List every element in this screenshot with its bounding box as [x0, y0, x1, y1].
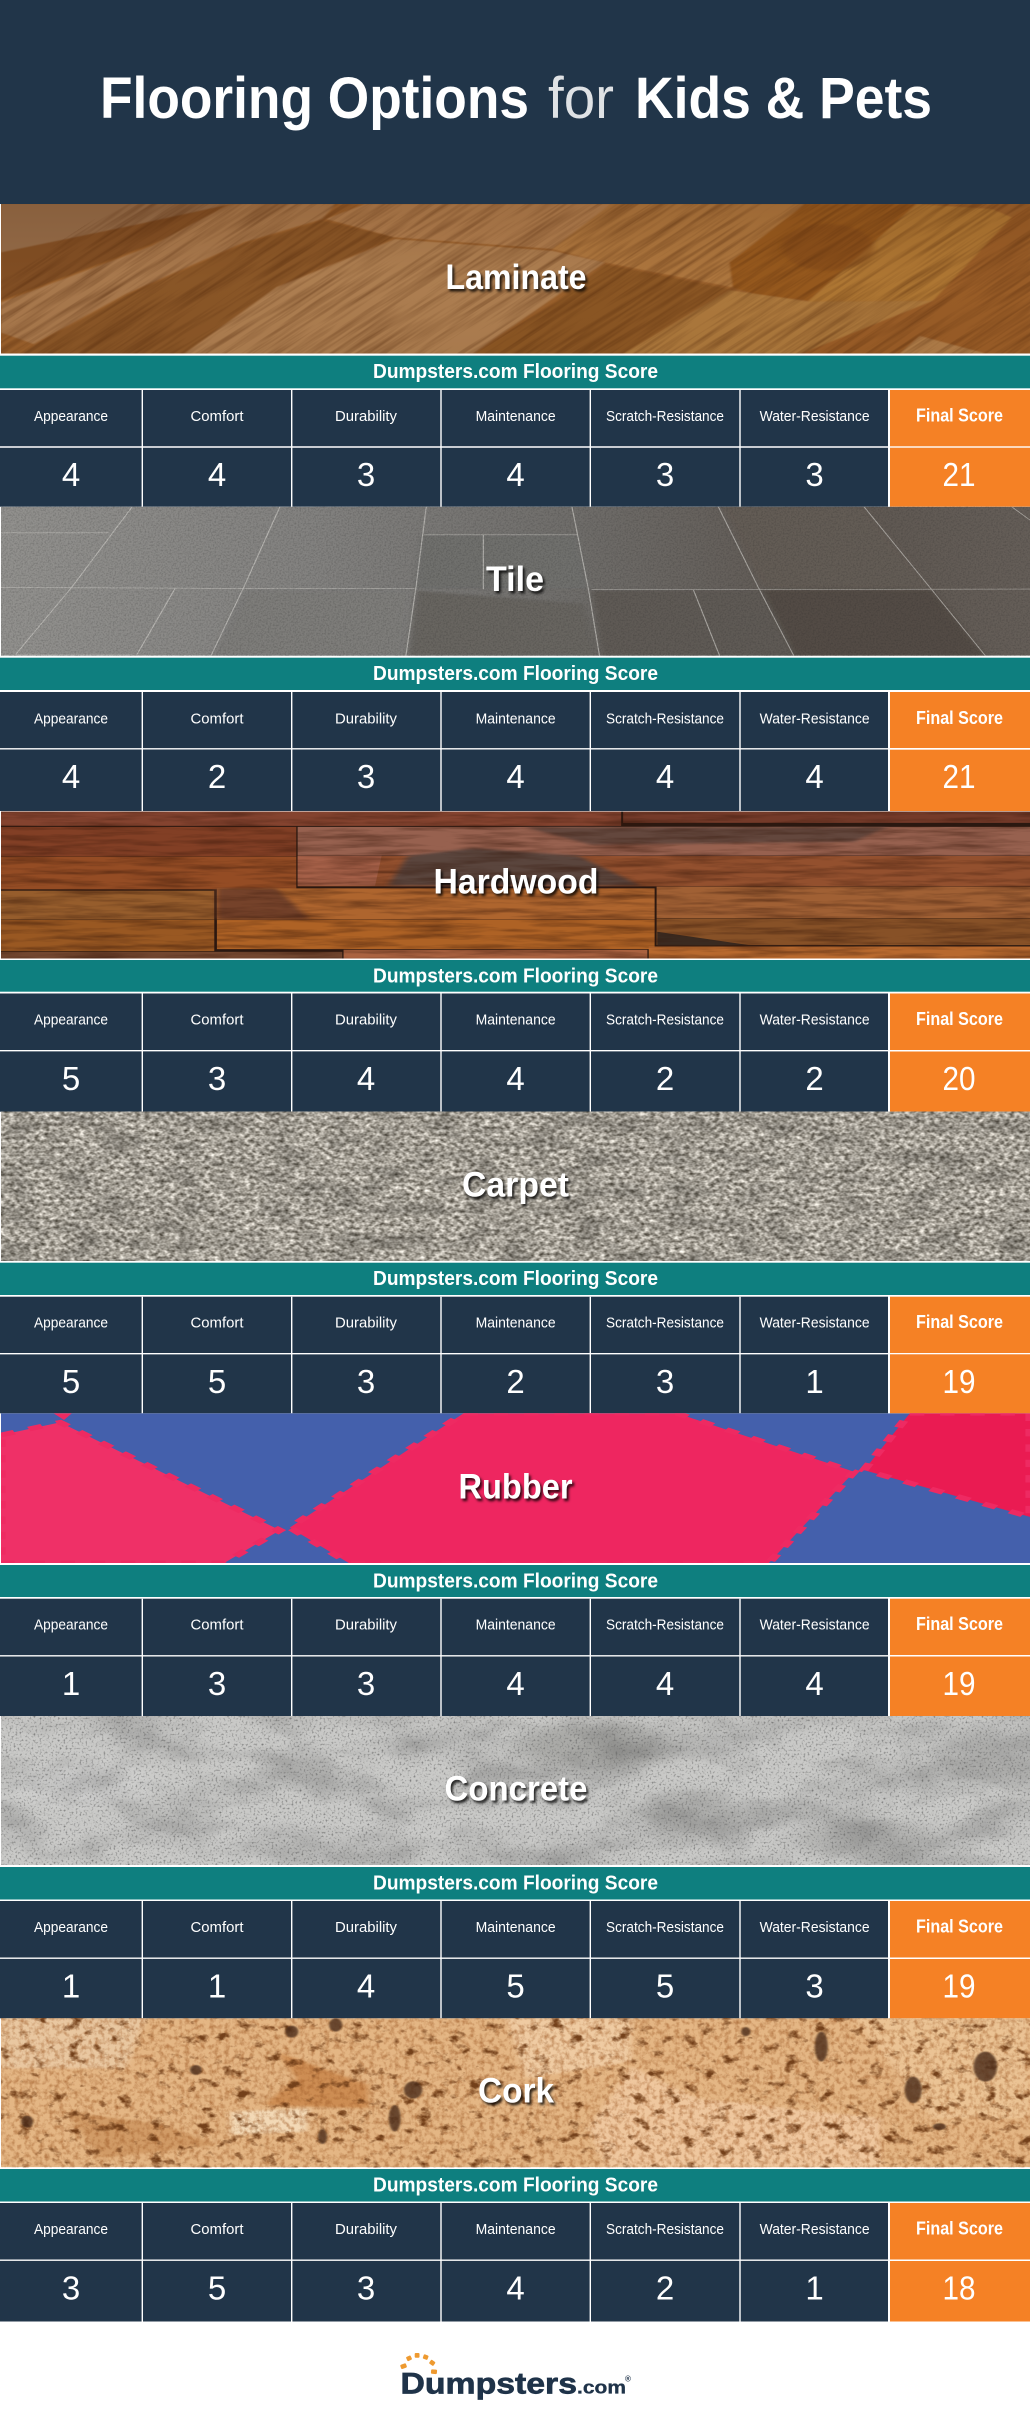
criteria scores: 4	[506, 2270, 525, 2306]
criteria scores	[62, 456, 824, 493]
criteria scores: 3	[357, 1363, 375, 1400]
final score: 19	[942, 1665, 976, 1702]
label: Laminate: Laminate	[446, 258, 586, 297]
final score	[890, 1599, 1030, 1716]
logo: Dumpsters.com	[400, 2353, 631, 2400]
criteria scores: 1	[805, 1363, 824, 1400]
panel: tile	[0, 507, 1030, 811]
criteria labels: Appearance	[34, 712, 108, 728]
criteria scores: 3	[357, 456, 375, 493]
criteria labels	[34, 1012, 870, 1028]
title: for	[548, 66, 614, 131]
final score: Final Score	[916, 406, 1003, 426]
criteria scores: 5	[656, 1968, 674, 2004]
criteria labels: Scratch-Resistance	[606, 1012, 724, 1028]
criteria labels: Appearance	[34, 409, 108, 425]
final score: Final Score	[916, 1614, 1003, 1634]
criteria scores: 1	[62, 1968, 80, 2004]
criteria scores: 3	[357, 2270, 375, 2306]
criteria scores	[62, 758, 824, 795]
criteria scores: 4	[805, 1665, 824, 1702]
criteria scores: 1	[805, 2270, 824, 2306]
criteria labels	[34, 409, 870, 425]
score band	[0, 1565, 1030, 1597]
score band: Dumpsters.com Flooring Score	[373, 361, 658, 383]
criteria scores: 2	[656, 2270, 674, 2306]
criteria labels: Scratch-Resistance	[606, 1920, 724, 1936]
criteria scores: 3	[208, 1060, 226, 1097]
criteria scores: 5	[62, 1060, 80, 1097]
criteria scores: 4	[62, 456, 80, 493]
criteria labels: Scratch-Resistance	[606, 1316, 724, 1332]
criteria labels	[34, 712, 870, 728]
title: Kids & Pets	[635, 66, 932, 131]
score band	[0, 1867, 1030, 1900]
criteria labels: Durability	[335, 1618, 398, 1634]
criteria scores: 2	[208, 758, 226, 795]
criteria labels: Durability	[335, 712, 398, 728]
final score	[890, 994, 1030, 1112]
criteria labels: Water-Resistance	[760, 1920, 870, 1936]
final score: 19	[942, 1363, 976, 1400]
criteria scores: 4	[506, 1665, 525, 1702]
title: Flooring Options	[100, 66, 529, 131]
criteria scores: 2	[506, 1363, 525, 1400]
criteria labels: Comfort	[190, 409, 244, 425]
criteria scores: 3	[656, 1363, 674, 1400]
criteria scores: 1	[208, 1968, 226, 2004]
score band	[0, 356, 1030, 388]
photo: cork texture	[1, 2018, 1030, 2167]
criteria scores: 4	[506, 456, 525, 493]
criteria scores: 4	[805, 758, 824, 795]
criteria labels: Maintenance	[476, 1316, 556, 1332]
criteria labels	[34, 1316, 870, 1332]
criteria labels: Maintenance	[476, 712, 556, 728]
label: Cork: Cork	[478, 2072, 555, 2111]
criteria labels: Water-Resistance	[760, 1618, 870, 1634]
score band	[0, 960, 1030, 992]
final score: 21	[942, 456, 976, 493]
criteria labels	[34, 1618, 870, 1634]
final score: 19	[942, 1968, 976, 2004]
panel: rubber	[0, 1413, 1030, 1716]
criteria scores	[62, 1363, 824, 1400]
photo: carpet texture	[1, 1112, 1030, 1261]
criteria scores: 4	[656, 1665, 674, 1702]
criteria scores	[62, 1060, 824, 1097]
photo: rubber tiles	[1, 1413, 1030, 1563]
criteria labels: Maintenance	[476, 1012, 556, 1028]
criteria labels: Appearance	[34, 2222, 108, 2238]
criteria labels: Appearance	[34, 1012, 108, 1028]
criteria scores: 5	[506, 1968, 525, 2004]
photo: tile floor	[1, 507, 1030, 656]
score table	[0, 2203, 1030, 2322]
score table	[0, 994, 1030, 1112]
final score: 18	[942, 2270, 976, 2306]
criteria scores: 3	[357, 758, 375, 795]
photo: concrete texture	[1, 1716, 1030, 1865]
criteria scores: 3	[357, 1665, 375, 1702]
criteria labels: Water-Resistance	[760, 1316, 870, 1332]
photo: laminate floor	[1, 204, 1030, 354]
label: Concrete: Concrete	[444, 1770, 588, 1809]
panel: hardwood	[0, 812, 1030, 1112]
criteria scores: 2	[656, 1060, 674, 1097]
criteria labels: Appearance	[34, 1316, 108, 1332]
criteria labels: Maintenance	[476, 409, 556, 425]
score band	[0, 2169, 1030, 2202]
label: Rubber: Rubber	[458, 1467, 573, 1506]
final score	[890, 1297, 1030, 1413]
score band: Dumpsters.com Flooring Score	[373, 1872, 658, 1894]
criteria scores: 1	[62, 1665, 80, 1702]
criteria labels: Scratch-Resistance	[606, 1618, 724, 1634]
final score	[890, 1901, 1030, 2018]
final score	[890, 390, 1030, 507]
criteria scores: 5	[208, 2270, 226, 2306]
criteria labels: Water-Resistance	[760, 2222, 870, 2238]
score table	[0, 1297, 1030, 1413]
photo: hardwood floor	[1, 812, 1030, 958]
criteria labels: Appearance	[34, 1618, 108, 1634]
criteria scores: 3	[62, 2270, 80, 2306]
score band: Dumpsters.com Flooring Score	[373, 1570, 658, 1592]
criteria labels: Comfort	[190, 1012, 244, 1028]
header panel	[0, 0, 1030, 204]
score band: Dumpsters.com Flooring Score	[373, 2174, 658, 2196]
criteria scores	[62, 1665, 824, 1702]
title	[100, 66, 932, 131]
logo: Dumpsters.com: .com	[577, 2376, 626, 2397]
final score: 21	[942, 758, 976, 795]
label: Hardwood: Hardwood	[434, 862, 598, 901]
criteria scores: 4	[357, 1968, 375, 2004]
final score: Final Score	[916, 708, 1003, 728]
panel: concrete	[0, 1716, 1030, 2018]
score table	[0, 1599, 1030, 1716]
criteria labels: Comfort	[190, 2222, 244, 2238]
final score	[890, 2203, 1030, 2322]
criteria labels: Scratch-Resistance	[606, 2222, 724, 2238]
criteria labels: Durability	[335, 2222, 398, 2238]
criteria scores	[62, 1968, 824, 2004]
criteria labels	[34, 1920, 870, 1936]
criteria scores: 4	[506, 758, 525, 795]
score table	[0, 390, 1030, 507]
criteria labels: Maintenance	[476, 2222, 556, 2238]
score band	[0, 658, 1030, 690]
criteria labels: Water-Resistance	[760, 712, 870, 728]
label: Tile: Tile	[486, 560, 544, 599]
criteria scores: 3	[805, 456, 824, 493]
criteria scores: 4	[506, 1060, 525, 1097]
score band: Dumpsters.com Flooring Score	[373, 966, 658, 988]
panel: laminate	[0, 204, 1030, 507]
final score: 20	[942, 1060, 976, 1097]
logo: Dumpsters.com: Dumpsters	[400, 2367, 577, 2400]
final score	[890, 692, 1030, 811]
score table	[0, 1901, 1030, 2018]
final score: Final Score	[916, 1312, 1003, 1332]
criteria labels	[34, 2222, 870, 2238]
criteria labels: Durability	[335, 1920, 398, 1936]
label: Carpet: Carpet	[462, 1166, 569, 1205]
panel: cork	[0, 2018, 1030, 2322]
criteria scores: 5	[62, 1363, 80, 1400]
criteria labels: Water-Resistance	[760, 1012, 870, 1028]
score band: Dumpsters.com Flooring Score	[373, 663, 658, 685]
final score: Final Score	[916, 1916, 1003, 1936]
criteria labels: Scratch-Resistance	[606, 409, 724, 425]
criteria scores: 2	[805, 1060, 824, 1097]
icon: logo arc of orange dots	[400, 2353, 437, 2374]
criteria labels: Water-Resistance	[760, 409, 870, 425]
final score: Final Score	[916, 2218, 1003, 2238]
criteria labels: Comfort	[190, 1316, 244, 1332]
logo: Dumpsters.com: ®	[625, 2374, 631, 2384]
criteria labels: Maintenance	[476, 1920, 556, 1936]
criteria scores: 5	[208, 1363, 226, 1400]
criteria scores: 4	[656, 758, 674, 795]
final score: Final Score	[916, 1009, 1003, 1029]
criteria labels: Comfort	[190, 712, 244, 728]
criteria labels: Maintenance	[476, 1618, 556, 1634]
score band	[0, 1263, 1030, 1295]
score table	[0, 692, 1030, 811]
criteria labels: Comfort	[190, 1618, 244, 1634]
panel: carpet	[0, 1112, 1030, 1413]
score band: Dumpsters.com Flooring Score	[373, 1268, 658, 1290]
criteria scores: 4	[62, 758, 80, 795]
criteria labels: Comfort	[190, 1920, 244, 1936]
criteria scores: 4	[208, 456, 226, 493]
criteria labels: Durability	[335, 1316, 398, 1332]
criteria scores: 3	[805, 1968, 824, 2004]
criteria labels: Appearance	[34, 1920, 108, 1936]
criteria labels: Durability	[335, 1012, 398, 1028]
criteria scores: 4	[357, 1060, 375, 1097]
criteria scores	[62, 2270, 824, 2306]
criteria labels: Scratch-Resistance	[606, 712, 724, 728]
criteria scores: 3	[656, 456, 674, 493]
criteria labels: Durability	[335, 409, 398, 425]
criteria scores: 3	[208, 1665, 226, 1702]
